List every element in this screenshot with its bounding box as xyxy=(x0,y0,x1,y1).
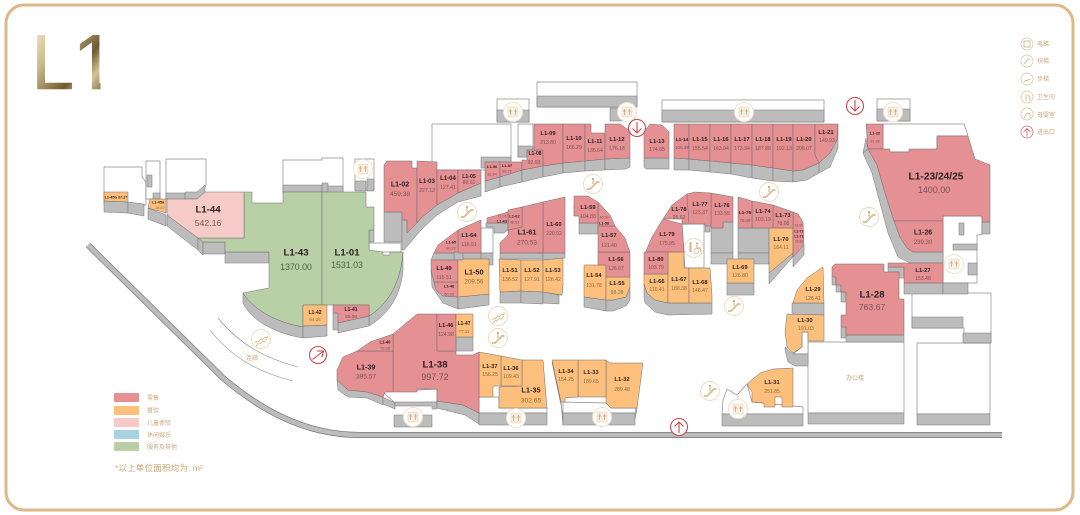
shop: L1-79: L1-79 xyxy=(659,232,675,238)
shop: L1-15: L1-15 xyxy=(692,137,708,143)
shop: L1-62: L1-62 xyxy=(509,214,520,218)
shop: L1-70 xyxy=(769,228,793,273)
shop: L1-18 xyxy=(752,124,773,168)
connecting corridor lines: 连廊 xyxy=(246,354,258,362)
shop: L1-22: L1-22 xyxy=(870,130,881,136)
shop: L1-69: L1-69 xyxy=(732,265,748,271)
shop: L1-54: L1-54 xyxy=(586,273,602,279)
shop: L1-30: 191.03 xyxy=(798,326,814,332)
shop: L1-31 xyxy=(747,368,793,407)
shop: L1-34: 154.25 xyxy=(558,377,574,383)
shop: L1-65: L1-65 xyxy=(446,240,456,244)
shop: L1-31: L1-31 xyxy=(764,380,780,386)
shop: L1-80: 103.79 xyxy=(648,265,664,271)
shop: L1-40 xyxy=(357,334,393,351)
shop: L1-29: L1-29 xyxy=(805,287,821,293)
legend: facility icons: 进出口 xyxy=(1037,128,1055,136)
shop: L1-34 xyxy=(552,360,578,402)
shop: L1-26 xyxy=(894,221,943,252)
shop: L1-22 xyxy=(866,124,883,149)
shop: L1-29 xyxy=(793,267,824,303)
shop: L1-54: 131.78 xyxy=(586,283,602,289)
shop: L1-53: L1-53 xyxy=(545,268,561,274)
shop: L1-58: L1-58 xyxy=(599,222,609,226)
label: office building: 办公楼 xyxy=(846,374,864,382)
shop: L1-21: 149.93 xyxy=(819,138,835,144)
shop: L1-03: 227.12 xyxy=(419,188,435,194)
shop: L1-76 xyxy=(711,193,733,228)
shop: L1-12: 176.18 xyxy=(609,146,625,152)
icon: WC xyxy=(728,400,748,418)
icon: stairs xyxy=(252,330,270,348)
shop: L1-16: L1-16 xyxy=(713,137,729,143)
grey structural blocks xyxy=(104,96,991,427)
shop: L1-45a xyxy=(148,199,166,213)
shop: L1-32 xyxy=(606,360,643,408)
shop: L1-79 xyxy=(646,219,684,252)
shop: L1-21 xyxy=(815,124,838,163)
shop: L1-43: 1370.00 xyxy=(280,262,312,272)
shop: L1-65: 80.22 xyxy=(446,246,456,250)
icon: escalator xyxy=(700,382,720,400)
shop: L1-29: 128.41 xyxy=(805,296,821,302)
shop: L1-10: 166.29 xyxy=(566,145,582,151)
shop: L1-38 xyxy=(393,314,479,413)
shop: L1-04: L1-04 xyxy=(440,176,456,182)
road strip xyxy=(88,245,1002,435)
shop: L1-63: L1-63 xyxy=(497,220,507,224)
shop: L1-33 xyxy=(578,360,606,397)
shop: L1-18: L1-18 xyxy=(755,137,771,143)
shop: L1-23/24/25 xyxy=(868,136,990,222)
note: unit of area: *以上单位面积均为: m² xyxy=(115,462,203,473)
shop: L1-53: 126.42 xyxy=(545,277,561,283)
shop: L1-01: 1531.03 xyxy=(331,260,363,270)
shop: L1-39 xyxy=(337,351,393,397)
shop: L1-28: L1-28 xyxy=(859,290,885,300)
title: L1 xyxy=(37,35,100,90)
shop: L1-62 xyxy=(508,207,522,230)
shop: L1-49: 115.51 xyxy=(436,275,452,281)
shop: L1-68: 146.47 xyxy=(692,288,708,294)
shop: L1-67 xyxy=(668,252,689,303)
shop: L1-56 xyxy=(598,252,630,277)
shop: L1-71/72 xyxy=(793,212,804,257)
shop: L1-08 xyxy=(522,150,543,170)
shop: L1-64 xyxy=(458,220,481,253)
shop: L1-31: 251.85 xyxy=(764,389,780,395)
shop: L1-40: L1-40 xyxy=(380,340,391,344)
shop: L1-73 xyxy=(773,205,793,228)
shop: L1-43 xyxy=(198,192,322,327)
shop: L1-55: 98.28 xyxy=(611,290,624,296)
shop: L1-23/24/25: L1-23/24/25 xyxy=(909,172,964,182)
shop: L1-37: 156.25 xyxy=(482,372,498,378)
shop: L1-23/24/25: 1400.00 xyxy=(918,185,950,195)
shop: L1-05: 89.61 xyxy=(463,180,476,186)
shop: L1-09 xyxy=(534,124,563,166)
shop: L1-45a: L1-45a xyxy=(152,200,165,204)
icon: escalator xyxy=(760,182,778,202)
shop: L1-56: 126.07 xyxy=(608,266,624,272)
shop: L1-44: 542.16 xyxy=(195,218,221,228)
legend: categories: 休闲娱乐 xyxy=(147,431,171,439)
shop: L1-36: L1-36 xyxy=(503,366,519,372)
shop: L1-80: L1-80 xyxy=(648,257,664,263)
shop: L1-68: L1-68 xyxy=(692,280,708,286)
shop: L1-48: L1-48 xyxy=(444,284,455,288)
shop: L1-10 xyxy=(563,124,585,163)
shop: L1-78 xyxy=(663,194,689,224)
icon: WC xyxy=(504,102,522,122)
shop: L1-77: 123.37 xyxy=(692,210,708,216)
shop: L1-36 xyxy=(501,356,522,386)
shop: L1-71/72: 81.99 xyxy=(795,224,803,228)
icon: WC xyxy=(734,102,754,122)
shop: L1-64: L1-64 xyxy=(461,233,477,239)
shop: L1-07 xyxy=(500,162,522,177)
shop: L1-06: L1-06 xyxy=(487,164,498,169)
shop: L1-19: L1-19 xyxy=(776,137,792,143)
arrow: entrance diagonal xyxy=(310,346,326,364)
shop: L1-08: 92.93 xyxy=(528,160,541,166)
shop: L1-46: L1-46 xyxy=(439,323,453,329)
shop: L1-10: L1-10 xyxy=(566,136,582,142)
icon: WC xyxy=(354,160,372,178)
shop: L1-30 xyxy=(785,314,824,353)
shop: L1-03 xyxy=(417,161,437,223)
icon: WC xyxy=(618,102,636,122)
shop: L1-06 xyxy=(485,162,500,181)
shop: L1-41 xyxy=(333,305,369,323)
shop: L1-66: 116.41 xyxy=(649,287,665,293)
shop: L1-60 xyxy=(543,197,565,253)
arrow: entrance down xyxy=(628,120,646,136)
shop: L1-67: L1-67 xyxy=(671,277,687,283)
shop: L1-52 xyxy=(521,260,543,292)
shop: L1-19: 192.13 xyxy=(776,146,792,152)
shop: L1-75: 78.49 xyxy=(740,218,751,223)
shop: L1-54 xyxy=(584,265,606,300)
shop: L1-63 xyxy=(487,212,508,224)
icon: escalator xyxy=(584,174,602,194)
shop: L1-37 xyxy=(479,352,501,397)
shop: L1-42 xyxy=(303,305,327,326)
shop: L1-16: 163.04 xyxy=(713,146,729,152)
shop: L1-41: 85.00 xyxy=(345,314,357,319)
shop: L1-59: L1-59 xyxy=(580,205,596,211)
shop: L1-20: L1-20 xyxy=(796,137,812,143)
shop: L1-35 xyxy=(499,360,547,408)
shop: L1-71/72: L1-72 xyxy=(794,230,804,234)
shop: L1-42: L1-42 xyxy=(308,310,322,316)
shop: L1-77: L1-77 xyxy=(692,202,708,208)
shop: L1-14: 108.38 xyxy=(675,145,689,150)
shop: L1-61 xyxy=(500,202,543,253)
shop: L1-08: L1-08 xyxy=(528,151,542,157)
icon: escalator xyxy=(488,328,508,348)
shop: L1-34: L1-34 xyxy=(558,369,574,375)
shop: L1-59: 104.88 xyxy=(580,214,596,220)
shop: L1-68 xyxy=(689,268,712,303)
shop: L1-26: 239.30 xyxy=(914,240,933,246)
shop: L1-50: L1-50 xyxy=(464,268,484,276)
shop: L1-27 xyxy=(888,263,943,283)
shop: L1-38: 997.72 xyxy=(421,372,449,382)
shop: L1-58: 46.59 xyxy=(600,216,608,220)
shop: L1-19 xyxy=(773,124,793,171)
shop: L1-48: 50.26 xyxy=(444,292,454,296)
shop: L1-64: 116.91 xyxy=(461,242,477,248)
shop: L1-12: L1-12 xyxy=(609,137,625,143)
shop: L1-55: L1-55 xyxy=(609,281,625,287)
shop: L1-02: L1-02 xyxy=(391,182,409,188)
shop: L1-45b: L1-45b 37.27 xyxy=(105,196,127,200)
icon: escalator xyxy=(724,296,744,316)
shop: L1-13 xyxy=(644,124,669,158)
shop: L1-52: L1-52 xyxy=(524,268,540,274)
legend: facility icons: 电梯 xyxy=(1037,40,1049,48)
legend: facility icons: 母婴室 xyxy=(1037,111,1055,119)
shop: L1-17 xyxy=(731,124,752,165)
title: L1: 1 xyxy=(73,18,116,106)
legend: categories xyxy=(114,393,177,451)
shop: L1-50 xyxy=(458,259,489,297)
shop: L1-76: L1-76 xyxy=(714,203,730,209)
shop: L1-55 xyxy=(606,277,630,300)
shop: L1-61: L1-61 xyxy=(518,228,536,236)
icon: restroom xyxy=(684,238,704,258)
shop: L1-58 xyxy=(598,202,615,226)
icon: stairs xyxy=(488,306,508,326)
legend: categories: 零售 xyxy=(147,394,159,402)
shop: L1-51: L1-51 xyxy=(502,268,518,274)
legend: categories: 儿童体验 xyxy=(147,419,171,427)
shop: L1-16 xyxy=(710,124,731,163)
shop: L1-18: 187.88 xyxy=(755,146,771,152)
shop: L1-80 xyxy=(644,252,668,274)
shop: L1-15: 155.54 xyxy=(692,146,708,152)
legend: facility icons: 卫生间 xyxy=(1037,93,1055,101)
shop: L1-11 xyxy=(585,124,605,161)
legend: facility icons xyxy=(1021,38,1055,138)
shop: L1-61: 270.53 xyxy=(517,240,537,246)
shop: L1-44: L1-44 xyxy=(195,204,221,216)
shop: L1-17: 173.34 xyxy=(734,146,750,152)
shop: L1-48 xyxy=(434,282,458,297)
shop: L1-15 xyxy=(689,124,710,161)
shop: L1-51 xyxy=(499,259,521,292)
shop: L1-53 xyxy=(543,258,563,295)
shop: L1-27: 153.48 xyxy=(915,276,931,282)
shop: L1-33: 189.65 xyxy=(583,379,599,385)
shop: L1-50: 209.56 xyxy=(465,278,484,286)
shop: L1-79: 175.95 xyxy=(659,241,675,247)
shop: L1-57: L1-57 xyxy=(601,233,617,239)
shop: L1-36: 109.43 xyxy=(503,374,519,380)
shop: L1-52: 127.91 xyxy=(524,277,540,283)
shop: L1-66: L1-66 xyxy=(649,279,665,285)
shop: L1-51: 136.52 xyxy=(502,277,518,283)
shop: L1-74 xyxy=(752,201,773,228)
shop: L1-35: 302.65 xyxy=(521,398,542,404)
arrow: entrance up xyxy=(670,418,688,436)
shop: L1-32: 289.48 xyxy=(614,387,630,393)
shop: L1-11: L1-11 xyxy=(588,139,603,145)
shop: L1-74: 103.19 xyxy=(755,217,771,223)
shop: L1-76: 133.55 xyxy=(714,211,730,217)
shop: L1-57 xyxy=(598,226,630,252)
shop: L1-70: L1-70 xyxy=(773,237,789,243)
shop: L1-09: 213.80 xyxy=(540,140,556,146)
shop: L1-69: 126.80 xyxy=(732,273,748,279)
shop: L1-42: 94.25 xyxy=(309,317,321,322)
shop: L1-01 xyxy=(322,192,403,316)
shop: L1-04 xyxy=(437,170,458,205)
shop: L1-20 xyxy=(793,124,819,171)
shop: L1-78: L1-78 xyxy=(671,207,687,213)
shop: L1-30: L1-30 xyxy=(797,318,813,324)
shop: L1-35: L1-35 xyxy=(521,386,541,394)
shop: L1-77 xyxy=(684,192,711,226)
shop: L1-49 xyxy=(431,260,458,282)
shop: L1-03: L1-03 xyxy=(419,179,435,185)
shop: L1-63: 71.92 xyxy=(498,214,506,218)
shop: L1-17: L1-17 xyxy=(734,137,750,143)
shop: L1-05: L1-05 xyxy=(462,174,476,180)
shop: L1-60: L1-60 xyxy=(546,222,562,228)
shop: L1-70: 164.11 xyxy=(773,245,789,251)
title: L1: L xyxy=(31,18,74,106)
shop: L1-47: 77.11 xyxy=(458,329,470,334)
shop: L1-69 xyxy=(727,259,754,283)
shop: L1-07: 68.76 xyxy=(502,170,512,174)
shop: L1-04: 127.41 xyxy=(440,185,456,191)
shop: L1-45a: 36.62 xyxy=(156,206,164,210)
shop: L1-40: 72.36 xyxy=(380,346,390,350)
panel: shop units xyxy=(104,124,990,413)
shop: L1-46: 124.98 xyxy=(438,332,454,338)
shop: L1-39: L1-39 xyxy=(357,362,375,372)
icon: WC xyxy=(404,408,422,426)
shop: L1-47: L1-47 xyxy=(457,321,471,327)
legend: facility icons: 步梯 xyxy=(1037,75,1049,83)
legend: categories: 服务及其他 xyxy=(147,443,177,451)
shop: L1-65 xyxy=(434,230,458,253)
arrow: entrance down right xyxy=(846,98,864,114)
shop: L1-73: L1-73 xyxy=(775,213,791,219)
shop: L1-57: 121.40 xyxy=(601,243,617,249)
shop: L1-05 xyxy=(458,170,481,193)
legend: facility icons: 扶梯 xyxy=(1037,57,1049,65)
shop: L1-46 xyxy=(437,314,456,351)
shop: L1-38: L1-38 xyxy=(422,360,448,370)
shop: L1-74: L1-74 xyxy=(755,209,771,215)
shop: L1-60: 220.02 xyxy=(546,231,562,237)
shop: L1-45b xyxy=(104,192,128,202)
shop: L1-56: L1-56 xyxy=(608,257,624,263)
icon: escalator xyxy=(458,202,476,222)
shop: L1-67: 188.38 xyxy=(671,286,687,292)
shop: L1-32: L1-32 xyxy=(614,377,630,383)
shop: L1-41: L1-41 xyxy=(344,307,358,313)
shop: L1-12 xyxy=(605,124,630,159)
shop: L1-27: L1-27 xyxy=(915,268,931,274)
icon: WC xyxy=(592,408,612,426)
shop: L1-33: L1-33 xyxy=(583,370,599,376)
shop: L1-47 xyxy=(456,314,473,337)
shop: L1-02 xyxy=(384,161,417,233)
shop: L1-26: L1-26 xyxy=(914,230,932,236)
icon: escalator xyxy=(860,208,878,226)
shop: L1-28 xyxy=(832,264,904,335)
shop: L1-44 xyxy=(167,192,244,238)
shop: L1-43: L1-43 xyxy=(283,248,309,258)
shop: L1-21: L1-21 xyxy=(818,130,834,136)
icon: WC xyxy=(944,254,964,274)
icon: WC xyxy=(506,408,526,428)
shop: L1-11: 135.64 xyxy=(587,148,603,154)
shop: L1-78: 95.62 xyxy=(673,215,686,221)
shop: L1-73: 78.08 xyxy=(777,221,790,227)
shop: L1-06: 92.94 xyxy=(487,172,497,176)
shop: L1-49: L1-49 xyxy=(436,266,452,272)
shop: L1-59 xyxy=(574,196,598,223)
shop: L1-13: 174.65 xyxy=(649,147,665,153)
shop: L1-02: 459.38 xyxy=(390,191,410,198)
legend: categories: 餐饮 xyxy=(147,406,159,414)
shop: L1-14: L1-14 xyxy=(676,137,689,143)
shop: L1-62: 48.53 xyxy=(510,220,519,224)
white building outlines xyxy=(104,82,991,414)
shop: L1-13: L1-13 xyxy=(649,139,665,145)
shop: L1-37: L1-37 xyxy=(482,364,498,370)
shop: L1-66 xyxy=(644,274,668,303)
connecting corridor lines xyxy=(210,318,298,381)
shop: L1-75 xyxy=(738,197,752,228)
shop: L1-22: 91.88 xyxy=(870,140,880,144)
shop: L1-20: 208.07 xyxy=(796,146,812,152)
shop: L1-71/72: 35.89 xyxy=(795,240,803,244)
shop: L1-28: 763.67 xyxy=(859,302,885,312)
shop: L1-09: L1-09 xyxy=(540,131,556,137)
shop: L1-07: L1-07 xyxy=(502,163,513,168)
shop: L1-01: L1-01 xyxy=(334,248,360,258)
shop: L1-75: L1-75 xyxy=(739,210,752,216)
icon: WC xyxy=(884,102,902,122)
shop: L1-39: 395.57 xyxy=(356,374,376,380)
shop: L1-14 xyxy=(674,124,689,159)
shop: L1-71/72: L1-71 xyxy=(794,234,804,238)
